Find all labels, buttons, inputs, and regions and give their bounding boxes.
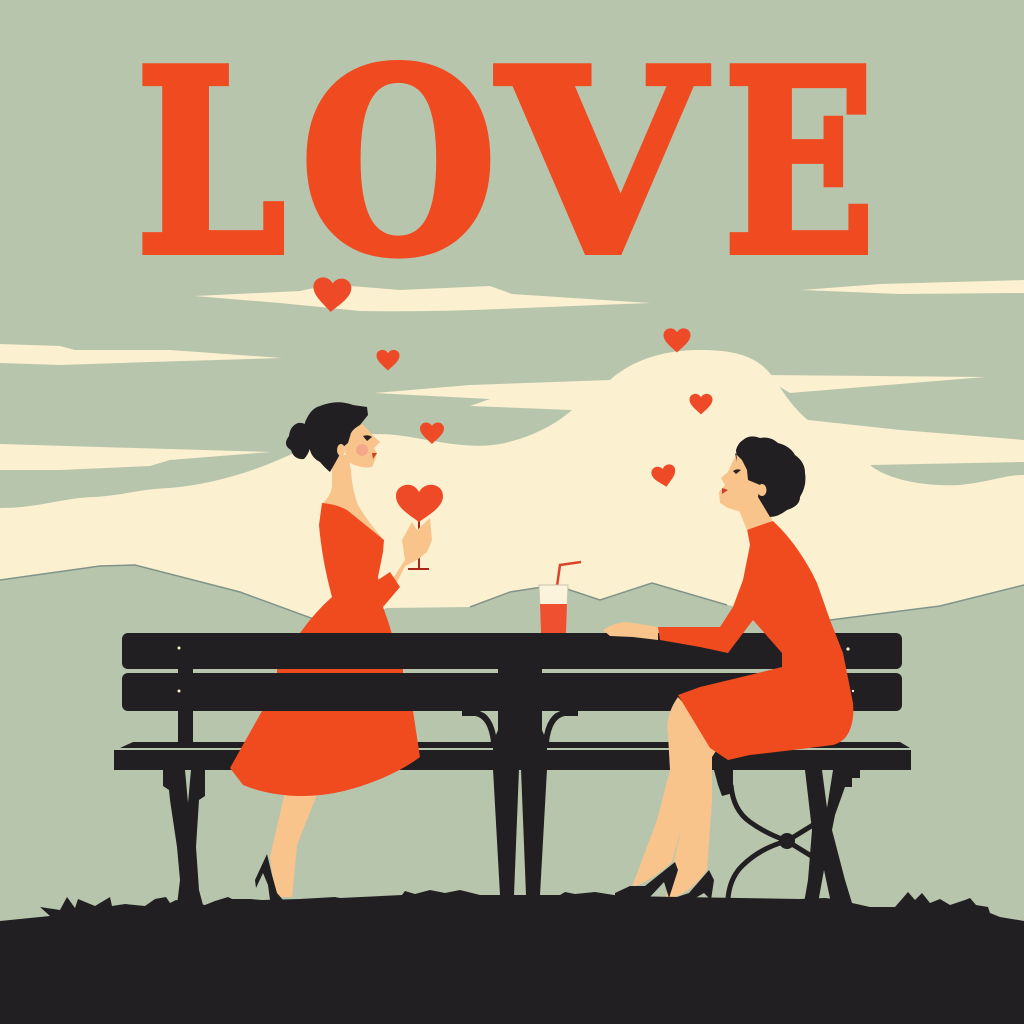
mountain and cloud mass	[0, 350, 1024, 625]
neck and chest	[322, 455, 384, 540]
heart stem	[408, 518, 429, 569]
right iron scrollwork	[728, 785, 813, 898]
back rails	[122, 633, 902, 669]
blush	[356, 444, 368, 456]
left woman skirt and leg	[230, 669, 420, 900]
glass body	[539, 585, 568, 634]
left woman upper body	[277, 402, 443, 673]
rail bolts	[178, 646, 854, 692]
left bench leg	[163, 770, 205, 905]
face	[719, 448, 770, 513]
skirt band between rails	[277, 669, 403, 673]
ear	[337, 444, 345, 456]
distant hill edge	[0, 565, 1024, 625]
ear	[758, 484, 766, 496]
title: V	[495, 15, 709, 311]
arm and hand	[392, 518, 432, 582]
skirt	[230, 711, 420, 796]
right shoe	[665, 870, 714, 901]
seat	[120, 742, 910, 748]
held heart	[396, 485, 443, 522]
face	[345, 422, 380, 468]
eye	[733, 469, 741, 474]
title: E	[724, 15, 875, 311]
shoe	[255, 854, 283, 900]
hair	[735, 436, 805, 517]
drink glass	[539, 562, 581, 634]
clouds	[0, 280, 1024, 470]
hair	[304, 402, 368, 472]
title	[136, 14, 875, 311]
centre post	[493, 669, 547, 895]
right woman	[603, 436, 853, 901]
straw	[557, 562, 581, 586]
dress	[658, 521, 853, 760]
left back post	[178, 668, 193, 744]
hair bun	[286, 423, 311, 459]
bench	[114, 633, 911, 905]
sleeve	[378, 572, 400, 607]
leg	[270, 792, 318, 897]
right bench legs	[804, 770, 860, 903]
legs	[632, 697, 720, 900]
centre brackets	[462, 713, 578, 742]
dress bodice	[277, 503, 403, 673]
floating hearts	[312, 277, 712, 489]
title: L	[136, 14, 285, 310]
ground	[0, 890, 1024, 1024]
title: O	[301, 16, 496, 311]
neck	[737, 495, 772, 530]
lips	[372, 453, 377, 459]
hand on rail	[603, 622, 658, 640]
eye	[363, 435, 372, 441]
lips	[722, 488, 728, 494]
left shoe	[615, 862, 678, 898]
drink	[540, 604, 567, 633]
